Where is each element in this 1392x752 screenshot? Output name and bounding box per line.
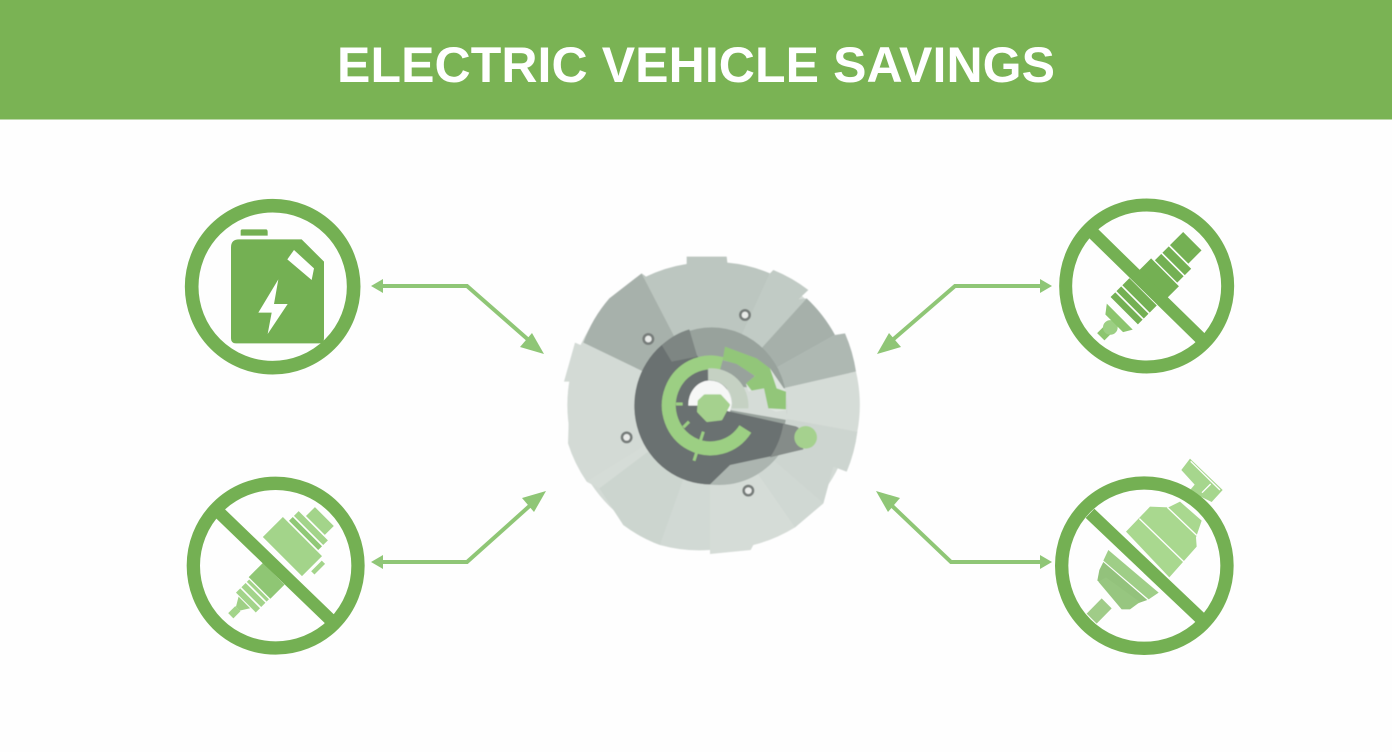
screws bbox=[622, 310, 753, 495]
header banner bbox=[0, 0, 1392, 120]
icon: crossed-out spark plug, bottom right bbox=[1062, 459, 1227, 648]
arrow: bottom right bbox=[876, 491, 1052, 569]
inner hub bbox=[634, 327, 803, 485]
upper right gauge segments bbox=[708, 347, 787, 412]
title: ELECTRIC VEHICLE SAVINGS bbox=[337, 37, 1055, 93]
arrow: bottom left bbox=[371, 491, 546, 569]
arrow: top right bbox=[877, 279, 1052, 354]
center hub bbox=[688, 380, 732, 420]
icon: crossed-out spark plug, bottom left bbox=[193, 483, 358, 648]
outer disc segments bbox=[564, 257, 860, 554]
gauge needle knob bbox=[794, 426, 817, 449]
central gauge dial bbox=[564, 257, 860, 554]
arrow: top left bbox=[371, 279, 544, 354]
icon: crossed-out spark plug, top right bbox=[1066, 205, 1228, 367]
icon: fuel can with lightning bolt bbox=[192, 206, 354, 368]
green progress ring bbox=[669, 362, 745, 461]
